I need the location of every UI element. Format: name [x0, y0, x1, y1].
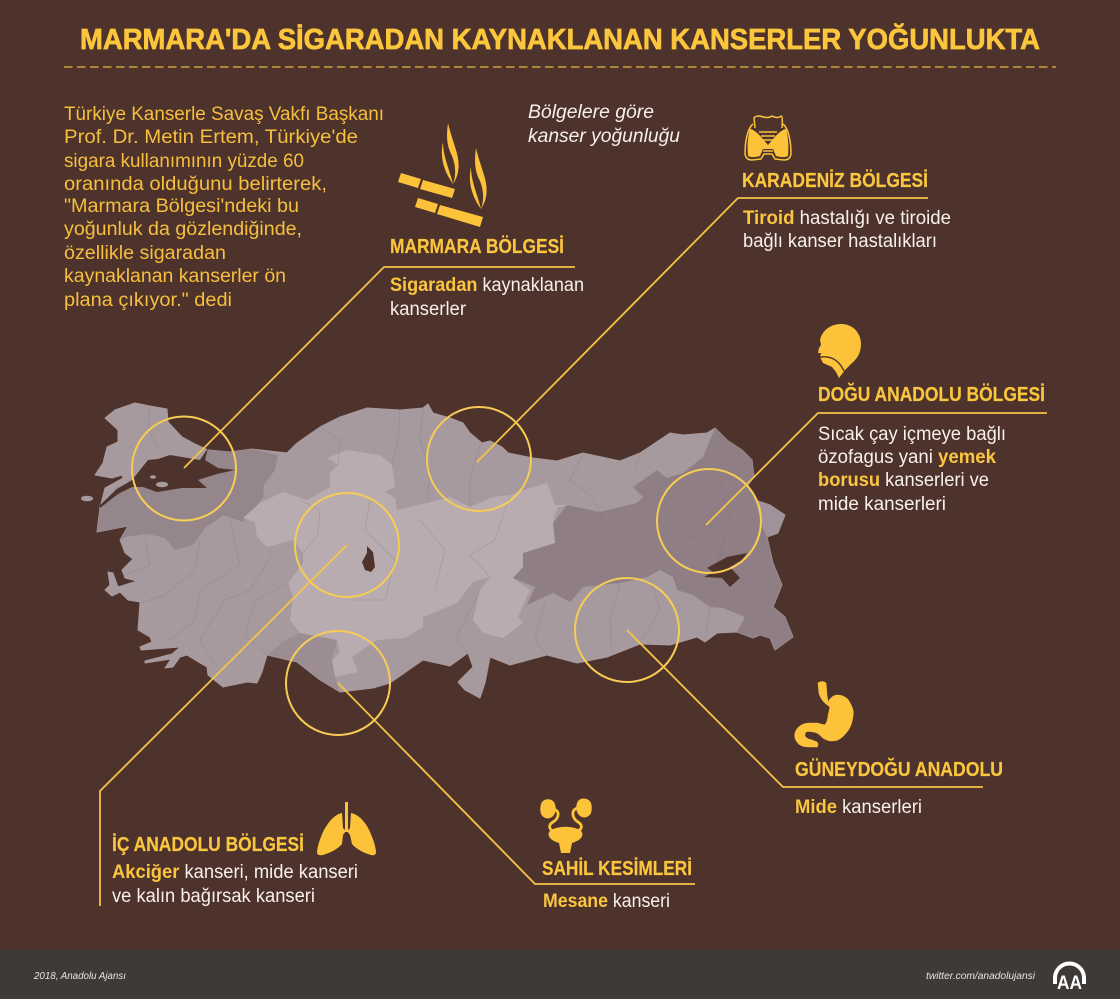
intro text block: özellikle sigaradan [64, 243, 226, 264]
Marmara darker region [97, 449, 278, 550]
copyright: 2018, Anadolu Ajansı [33, 970, 126, 982]
icon: AA logo [1055, 963, 1084, 994]
heading: Karadeniz: KARADENİZ BÖLGESİ [742, 169, 928, 192]
intro text block: yoğunluk da gözlendiğinde, [64, 219, 302, 240]
province borders [125, 406, 730, 665]
heading: Sahil Kesimleri: SAHİL KESİMLERİ [542, 857, 692, 880]
small island [150, 475, 156, 479]
Eastern Anatolia darker region [513, 428, 793, 650]
Marmara island [156, 482, 168, 487]
intro text block: "Marmara Bölgesi'ndeki bu [64, 196, 299, 217]
text: Doğu Anadolu [818, 424, 1006, 515]
map subtitle [528, 102, 680, 147]
intro text block: kaynaklanan kanserler ön [64, 266, 286, 287]
Gökçeada [81, 496, 93, 501]
icon: kidneys and bladder [540, 799, 592, 853]
icon: AA logo: AA [1057, 973, 1082, 994]
heading: Marmara: MARMARA BÖLGESİ [390, 235, 564, 258]
text: Doğu Anadolu: Sıcak çay içmeye bağlı [818, 424, 1006, 445]
text: Karadeniz: bağlı kanser hastalıkları [743, 231, 937, 252]
text: Doğu Anadolu: borusu kanserleri ve [818, 470, 989, 491]
title: MARMARA'DA SİGARADAN KAYNAKLANAN KANSERLER YOĞUNLUKTA [80, 22, 1040, 56]
Central Anatolia light region [243, 450, 567, 677]
Iğdır region [755, 500, 785, 537]
intro text block: sigara kullanımının yüzde 60 [64, 151, 304, 172]
intro text block: Türkiye Kanserle Savaş Vakfı Başkanı [64, 104, 384, 125]
map subtitle: kanser yoğunluğu [528, 126, 680, 147]
Lake Van [704, 553, 747, 587]
map subtitle: Bölgelere göre [528, 102, 654, 123]
intro text block: Prof. Dr. Metin Ertem, Türkiye'de [64, 127, 358, 148]
text: İç Anadolu: Akciğer kanseri, mide kanseri [112, 862, 358, 883]
icon: head and throat [818, 324, 861, 378]
intro text block: plana çıkıyor." dedi [64, 290, 232, 311]
intro text block: oranında olduğunu belirterek, [64, 174, 327, 195]
heading: Doğu Anadolu: DOĞU ANADOLU BÖLGESİ [818, 382, 1045, 406]
text: Karadeniz: Tiroid hastalığı ve tiroide [743, 208, 951, 229]
icon: cigarettes and smoke [398, 123, 487, 227]
text: Sahil Kesimleri: Mesane kanseri [543, 891, 670, 912]
icon: thyroid [745, 116, 791, 160]
panel: Karadeniz [742, 116, 951, 252]
icon: stomach [795, 682, 853, 747]
text: Doğu Anadolu: özofagus yani yemek [818, 447, 996, 468]
Western Mediterranean region [267, 633, 340, 692]
text: Marmara: Sigaradan kaynaklanan [390, 275, 584, 296]
text: İç Anadolu [112, 862, 358, 907]
panel: İç Anadolu [112, 802, 376, 907]
intro text block [64, 104, 384, 311]
text: Marmara [390, 275, 584, 320]
map of Turkey [81, 403, 793, 698]
text: Güneydoğu Anadolu: Mide kanserleri [795, 797, 922, 818]
heading: Güneydoğu Anadolu: GÜNEYDOĞU ANADOLU [795, 757, 1003, 781]
heading: İç Anadolu: İÇ ANADOLU BÖLGESİ [112, 833, 304, 856]
text: Marmara: kanserler [390, 299, 467, 320]
text: Karadeniz [743, 208, 951, 252]
Marmara Sea and Dardanelles [100, 448, 235, 508]
Lake Tuz [362, 546, 375, 572]
twitter handle: twitter.com/anadolujansi [926, 970, 1036, 982]
region circles and leader lines [100, 198, 1047, 906]
panel: Güneydoğu Anadolu [795, 682, 1003, 818]
icon: lungs [317, 802, 376, 855]
text: İç Anadolu: ve kalın bağırsak kanseri [112, 886, 315, 907]
Malatya light region [473, 577, 530, 638]
text: Doğu Anadolu: mide kanserleri [818, 494, 946, 515]
footer bar [0, 950, 1120, 999]
panel: Sahil Kesimleri [540, 799, 692, 912]
panel: Marmara [390, 123, 584, 320]
panel: Doğu Anadolu [818, 324, 1045, 515]
